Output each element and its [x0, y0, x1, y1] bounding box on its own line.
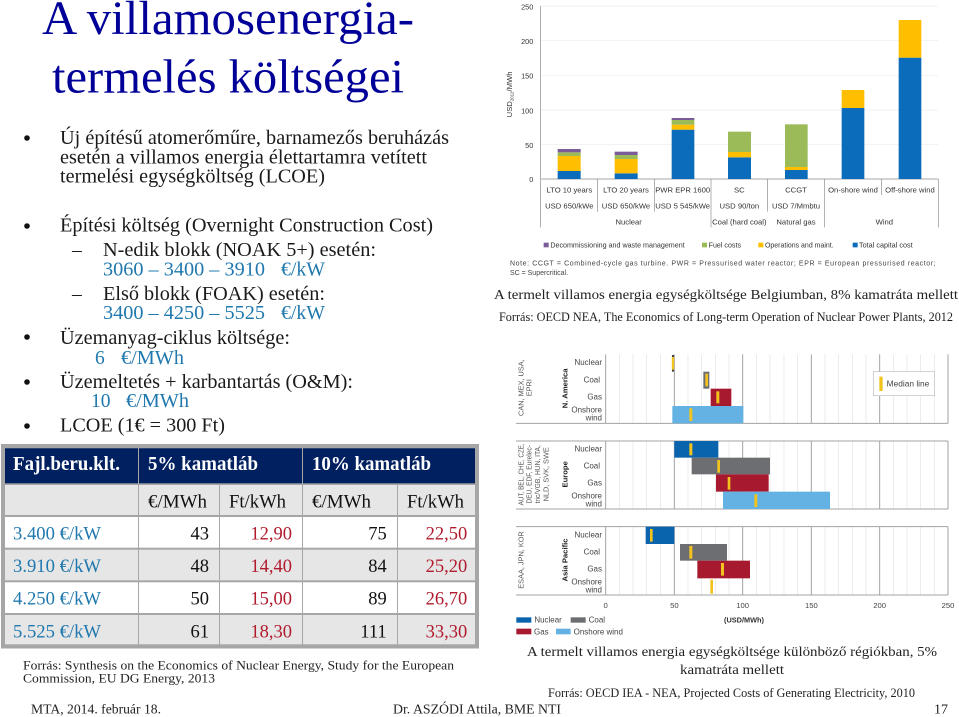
category labels: Gas [587, 393, 602, 402]
technology legend: Onshore wind [574, 627, 623, 636]
country lists: EPRI [525, 379, 534, 396]
panel: Asia Pacific [646, 527, 750, 594]
table header: 5% kamatláb [148, 453, 258, 475]
caption: Belgium chart: Forrás: OECD NEA, The Economics of Long-term Operation of Nuclear Power Plants, 2012 [499, 310, 953, 324]
x axis labels [545, 186, 935, 227]
x axis labels: USD 650/kWe [545, 201, 594, 210]
table units: Ft/kWh [407, 493, 464, 513]
table source: Commission, EU DG Energy, 2013 [23, 670, 215, 685]
footer: MTA, 2014. február 18. [31, 702, 161, 717]
category labels: Nuclear [574, 530, 602, 539]
table forint values: 33,30 [426, 622, 467, 642]
bullet list: 3060 – 3400 – 3910 [103, 260, 265, 281]
bullet list [24, 127, 449, 437]
table euro values: 43 [190, 524, 209, 544]
y axis: 0 [529, 175, 533, 184]
chart legend: Fuel costs [709, 241, 741, 250]
bullet list: LCOE (1€ = 300 Ft) [60, 416, 225, 437]
table euro values: 61 [190, 622, 209, 642]
x axis labels: Off-shore wind [885, 186, 935, 195]
bullet list: Új építésű atomerőműre, barnamezős beruházás [60, 127, 449, 149]
x axis values: 100 [736, 601, 749, 610]
table row labels: 4.250 €/kW [13, 589, 102, 609]
table euro values: 84 [368, 557, 387, 577]
country lists: AUT, BEL, CHE, CZE, [516, 443, 525, 505]
y axis: 200 [521, 37, 533, 46]
y axis: 50 [525, 141, 533, 150]
category labels [571, 358, 603, 594]
table forint values: 15,00 [250, 589, 292, 609]
region names: Europe [560, 461, 569, 488]
x axis labels: Wind [876, 218, 893, 227]
chart note: Note: CCGT = Combined-cycle gas turbine. PWR = Pressurised water reactor; EPR = European pressurised reactor; [510, 261, 936, 268]
chart note: SC = Supercritical. [510, 270, 568, 277]
y axis title: 2012 [509, 91, 514, 101]
x axis labels: LTO 10 years [546, 186, 592, 195]
table euro values: 89 [368, 589, 387, 609]
bullet list: Építési költség (Overnight Construction Cost) [60, 215, 433, 237]
technology legend [516, 616, 623, 636]
bullet list: – [71, 284, 82, 305]
technology legend: Gas [534, 627, 549, 636]
x axis values: 0 [604, 601, 608, 610]
table forint values: 12,90 [250, 524, 292, 544]
table header: Fajl.beru.klt. [13, 453, 120, 475]
title [42, 0, 414, 104]
caption: Belgium chart [494, 288, 958, 324]
x axis values: 150 [805, 601, 818, 610]
category labels: Nuclear [574, 445, 602, 454]
x axis labels: USD 7/Mmbtu [772, 201, 820, 210]
bullet list: €/MWh [121, 348, 184, 369]
table euro values [190, 524, 387, 642]
title: termelés költségei [52, 51, 404, 104]
table forint values: 18,30 [250, 622, 292, 642]
country lists: ESAA, JPN, KOR [516, 531, 525, 589]
footer: Dr. ASZÓDI Attila, BME NTI [393, 700, 561, 717]
caption: regional chart: kamatráta mellett [680, 663, 784, 678]
caption: Belgium chart: A termelt villamos energia egységköltsége Belgiumban, 8% kamatráta mellett [494, 288, 958, 303]
bar: LTO 10 years [558, 149, 581, 179]
median line key: Median line [887, 379, 930, 388]
country lists: NLD, SVK, SWE [541, 447, 550, 501]
category labels: Onshore [571, 405, 603, 414]
x axis labels: USD 650/kWe [602, 201, 650, 210]
bullet list: 10 [91, 391, 110, 412]
chart legend: Decommissioning and waste management [550, 241, 685, 250]
x axis values: 200 [873, 601, 886, 610]
bar: CCGT [785, 124, 808, 179]
country lists: tric/VGB, HUN, ITA, [533, 445, 542, 503]
table forint values: 26,70 [426, 589, 467, 609]
y axis title: /MWh [505, 72, 514, 92]
x axis values: 50 [670, 601, 679, 610]
x axis labels: USD 90/ton [720, 201, 759, 210]
category labels: wind [585, 585, 602, 594]
table forint values: 25,20 [426, 557, 467, 577]
table forint values: 22,50 [426, 524, 467, 544]
x axis labels: On-shore wind [828, 186, 878, 195]
chart legend: Total capital cost [859, 241, 913, 250]
country lists [516, 359, 550, 589]
panel: North America [672, 355, 743, 423]
x axis labels: Coal (hard coal) [712, 218, 767, 227]
bullet list: 6 [95, 348, 105, 369]
table euro values: 48 [190, 557, 209, 577]
bullet list: – [71, 240, 82, 261]
x axis labels: LTO 20 years [603, 186, 649, 195]
y axis [521, 2, 533, 184]
table forint values [250, 524, 467, 642]
category labels: Coal [584, 462, 600, 471]
category labels: Onshore [571, 577, 603, 586]
footer [31, 700, 948, 717]
table source [23, 657, 455, 685]
country lists: CAN, MEX, USA, [516, 359, 525, 416]
footer: 17 [934, 702, 948, 717]
stacked bar chart: Belgium [505, 2, 938, 277]
bar: on-shore wind [842, 90, 864, 179]
y axis: 100 [521, 106, 533, 115]
table units: €/MWh [312, 493, 371, 513]
chart legend: Operations and maint. [765, 241, 834, 250]
table header [13, 453, 431, 475]
x axis unit: (USD/MWh) [724, 616, 764, 625]
caption: regional chart: Forrás: OECD IEA - NEA, Projected Costs of Generating Electricity, 2010 [548, 685, 915, 700]
category labels: wind [585, 500, 602, 509]
x axis values: 250 [942, 601, 954, 610]
caption: regional chart [527, 645, 937, 700]
y axis: 250 [521, 2, 533, 11]
region names [560, 368, 569, 581]
y axis: 150 [521, 72, 533, 81]
table euro values: 75 [368, 524, 387, 544]
category labels: Gas [587, 565, 602, 574]
technology legend: Nuclear [534, 616, 562, 625]
table row labels: 3.910 €/kW [13, 557, 102, 577]
table euro values: 111 [360, 622, 387, 642]
category labels: Onshore [571, 492, 603, 501]
table units: Ft/kWh [229, 493, 286, 513]
region names: Asia Pacific [560, 538, 569, 581]
bullet list: Üzemanyag-ciklus költsége: [60, 328, 290, 349]
region names: N. America [560, 368, 569, 408]
chart legend [544, 241, 913, 250]
table source: Forrás: Synthesis on the Economics of Nuclear Energy, Study for the European [23, 657, 455, 672]
range bar chart: regions [516, 354, 954, 636]
cost table [1, 444, 479, 648]
bullet list: €/kW [281, 303, 326, 324]
bar: off-shore wind [899, 20, 921, 179]
table units: €/MWh [148, 493, 207, 513]
technology legend: Coal [589, 616, 605, 625]
y axis title: USD [505, 101, 514, 117]
x axis labels: USD 5 545/kWe [655, 201, 710, 210]
x axis labels: PWR EPR 1600 [655, 186, 710, 195]
x axis labels: CCGT [785, 186, 807, 195]
panel: Europe [674, 441, 830, 509]
x axis labels: Nuclear [615, 218, 642, 227]
x axis labels: Natural gas [776, 218, 816, 227]
table units [148, 493, 464, 513]
x axis values [604, 601, 954, 610]
category labels: Nuclear [574, 358, 602, 367]
chart note [510, 261, 936, 277]
bullet list: Első blokk (FOAK) esetén: [103, 284, 325, 305]
table euro values: 50 [190, 589, 209, 609]
median line key [873, 372, 935, 396]
table row labels: 5.525 €/kW [13, 622, 102, 642]
bullet list: termelési egységköltség (LCOE) [60, 166, 325, 188]
category labels: Gas [587, 478, 602, 487]
bullet list: N-edik blokk (NOAK 5+) esetén: [103, 240, 376, 261]
table header: 10% kamatláb [312, 453, 431, 475]
bullet list: esetén a villamos energia élettartamra vetített [60, 148, 428, 168]
bullet list: €/MWh [126, 391, 189, 412]
category labels: Coal [584, 375, 600, 384]
bullet list: Üzemeltetés + karbantartás (O&M): [60, 372, 353, 393]
category labels: wind [585, 413, 602, 422]
bullet list: 3400 – 4250 – 5525 [103, 303, 265, 324]
bullet list: €/kW [281, 260, 326, 281]
table row labels [13, 524, 102, 642]
table forint values: 14,40 [250, 557, 292, 577]
bar: LTO 20 years [615, 152, 638, 179]
category labels: Coal [584, 547, 600, 556]
table row labels: 3.400 €/kW [13, 524, 102, 544]
x axis labels: SC [734, 186, 745, 195]
caption: regional chart: A termelt villamos energia egységköltsége különböző régiókban, 5% [527, 645, 937, 660]
bar: PWR EPR 1600 [672, 118, 694, 179]
bar: SC [728, 132, 751, 179]
country lists: DEU, EDF, Eurelec- [525, 445, 534, 503]
